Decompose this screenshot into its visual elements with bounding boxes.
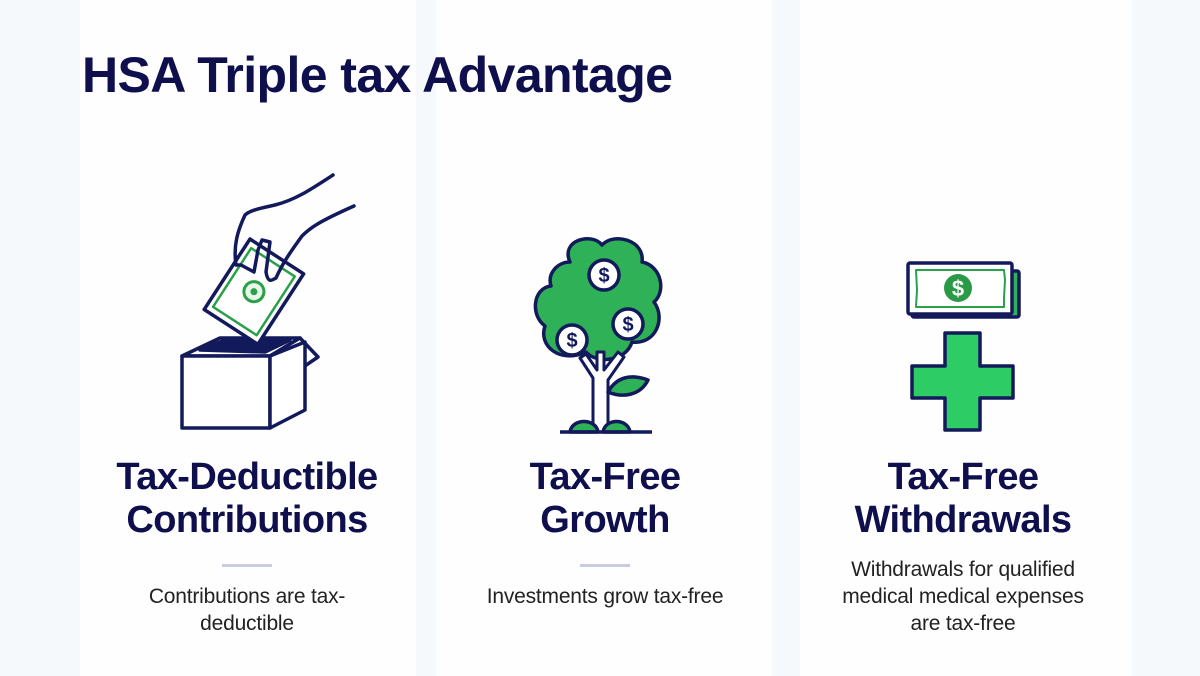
description: medical medical expenses [842,585,1084,608]
panel: withdrawals [800,0,1132,676]
description: deductible [200,612,294,635]
heading: Growth [540,499,670,541]
icon: dollar bill and medical cross: $ [952,276,964,301]
heading: Contributions [126,499,368,541]
column: tax-deductible contributions [116,456,378,635]
icon: money tree: $ [598,265,610,287]
heading: Tax-Free [530,456,680,498]
description [842,558,1084,635]
heading: Withdrawals [855,499,1071,541]
description [149,585,345,635]
icon: money tree: $ [566,330,578,352]
description: are tax-free [910,612,1015,635]
title: HSA Triple tax Advantage [82,47,672,103]
heading [116,456,378,541]
description: Contributions are tax- [149,585,345,608]
description: Investments grow tax-free [487,585,723,608]
icon: money tree: $ [622,314,634,336]
icon: hand dropping money into box [182,175,354,428]
panel: growth [436,0,772,676]
heading: Tax-Deductible [116,456,378,498]
heading [530,456,680,541]
icon: dollar bill and medical cross [908,263,1019,430]
panel: contributions [80,0,416,676]
column: tax-free growth [487,456,723,608]
description: Withdrawals for qualified [851,558,1075,581]
heading [854,456,1071,541]
icon: money tree [535,239,661,432]
column: tax-free withdrawals [842,456,1084,635]
heading: Tax-Free [888,456,1038,498]
